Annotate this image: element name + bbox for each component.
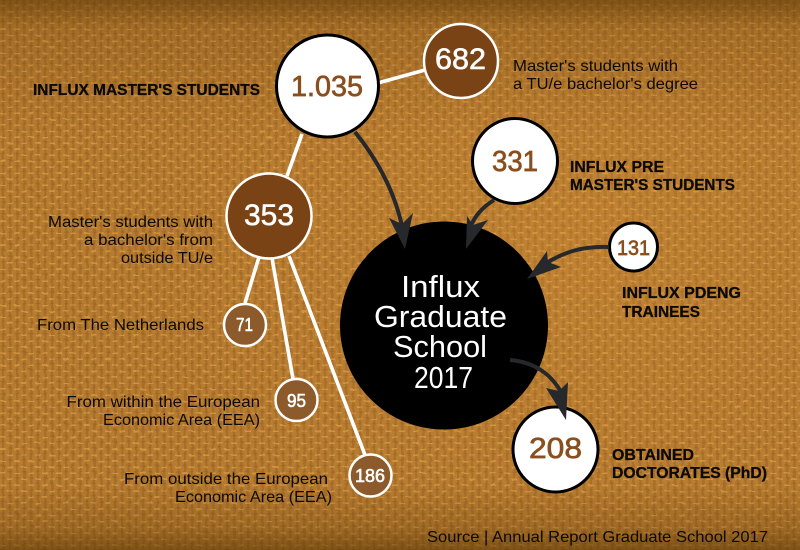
label: influx master's students: INFLUX MASTER'S STUDENTS bbox=[33, 82, 260, 99]
label: obtained doctorates bbox=[612, 447, 767, 482]
label: obtained doctorates: DOCTORATES (PhD) bbox=[612, 465, 767, 482]
label: from outside the EEA: Economic Area (EEA) bbox=[175, 489, 332, 506]
label: influx PDEng trainees: TRAINEES bbox=[622, 304, 700, 321]
label: influx pre master's students: MASTER'S STUDENTS bbox=[570, 177, 735, 194]
arrow: graduate school to obtained doctorates bbox=[510, 360, 568, 420]
circle: 682: 682 bbox=[435, 43, 486, 76]
arrow: master's students to graduate school bbox=[355, 132, 413, 249]
label: from within the EEA bbox=[66, 394, 260, 429]
label: from within the EEA: From within the European bbox=[66, 394, 260, 411]
circle: 131: 131 bbox=[617, 237, 650, 260]
label: master's students with TU/e bachelor's degree bbox=[513, 58, 698, 93]
connector lines between student groups bbox=[245, 70, 425, 455]
label: influx pre master's students: INFLUX PRE bbox=[570, 159, 664, 176]
label: master's students with bachelor's from outside TU/e: Master's students with bbox=[48, 214, 213, 231]
source line: Source | Annual Report Graduate School 2017 bbox=[427, 529, 768, 546]
arrow: pre master's students to graduate school bbox=[466, 200, 494, 249]
circle: 1.035 influx master's students bbox=[276, 35, 378, 137]
label: influx pre master's students bbox=[570, 159, 735, 194]
arrow: PDEng trainees to graduate school bbox=[527, 247, 609, 279]
circle: 331: 331 bbox=[492, 146, 538, 178]
circle: 208: 208 bbox=[529, 433, 582, 465]
central circle: Influx Graduate School 2017: Influx bbox=[401, 269, 481, 304]
circle: 186: 186 bbox=[355, 466, 385, 486]
label: from outside the EEA bbox=[124, 471, 332, 506]
circle: 95 bbox=[276, 379, 318, 421]
circle: 353 bbox=[226, 174, 312, 258]
label: master's students with TU/e bachelor's degree: Master's students with bbox=[513, 58, 678, 75]
label: master's students with bachelor's from outside TU/e bbox=[48, 214, 213, 267]
label: from outside the EEA: From outside the European bbox=[124, 471, 328, 488]
label: from the Netherlands: From The Netherlands bbox=[37, 317, 204, 334]
circle: 186 bbox=[350, 454, 392, 496]
central circle: Influx Graduate School 2017: 2017 bbox=[414, 360, 473, 395]
circle: 682 bbox=[424, 24, 498, 98]
circle: 71: 71 bbox=[236, 315, 253, 335]
circle: 331 bbox=[472, 118, 558, 204]
label: from within the EEA: Economic Area (EEA) bbox=[103, 412, 260, 429]
circle: 131 bbox=[610, 223, 658, 271]
circle: 71 bbox=[224, 304, 266, 346]
label: master's students with bachelor's from outside TU/e: a bachelor's from bbox=[84, 232, 213, 249]
circle: 95: 95 bbox=[287, 391, 306, 411]
circle: 208 bbox=[513, 407, 598, 492]
label: master's students with TU/e bachelor's degree: a TU/e bachelor's degree bbox=[513, 76, 698, 93]
central circle: Influx Graduate School 2017: School bbox=[393, 329, 487, 364]
central circle: Influx Graduate School 2017 bbox=[340, 222, 548, 430]
label: influx PDEng trainees: INFLUX PDENG bbox=[622, 285, 741, 302]
label: obtained doctorates: OBTAINED bbox=[612, 447, 694, 464]
central circle: Influx Graduate School 2017: Graduate bbox=[374, 299, 507, 334]
label: master's students with bachelor's from outside TU/e: outside TU/e bbox=[121, 250, 213, 267]
label: influx PDEng trainees bbox=[622, 285, 741, 321]
circle: 1.035 influx master's students: 1.035 bbox=[291, 71, 363, 103]
circle: 353: 353 bbox=[244, 199, 294, 232]
